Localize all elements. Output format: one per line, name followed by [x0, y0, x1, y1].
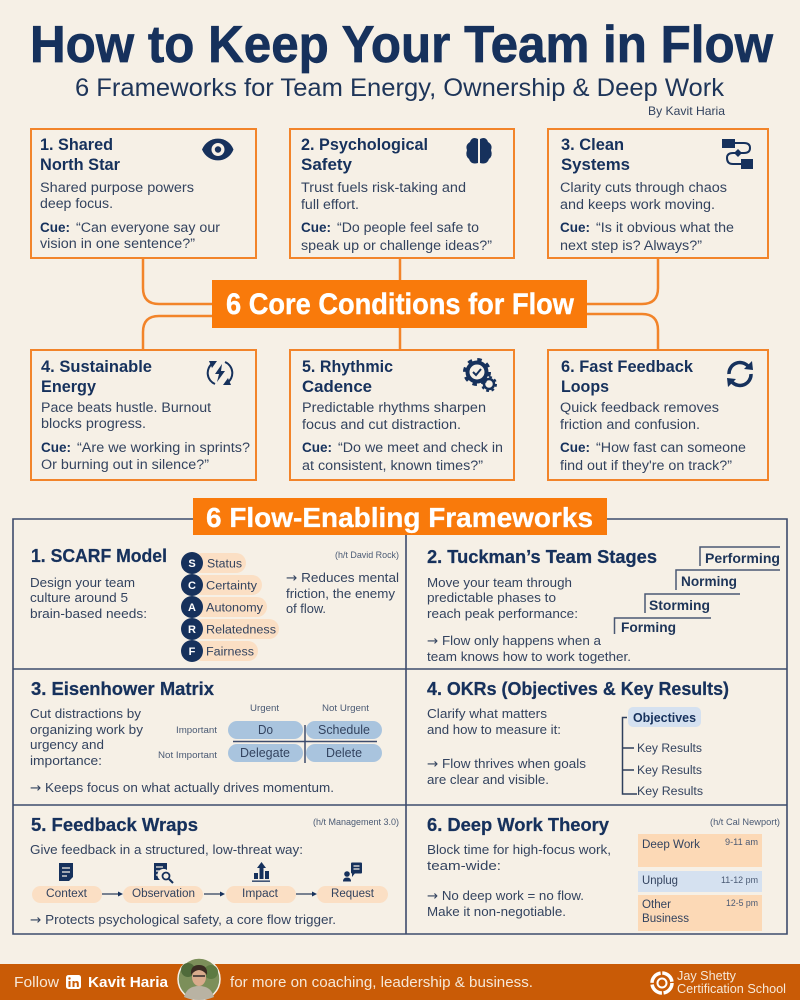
feedback process flow: Observation	[132, 888, 195, 900]
panel: deep work theory: 6. Deep Work Theory	[427, 815, 609, 835]
staircase diagram: Storming	[649, 597, 710, 613]
title: How to Keep Your Team in Flow	[30, 16, 774, 74]
priority matrix: Schedule	[318, 722, 370, 737]
panel: scarf model: → Reduces mental	[286, 570, 399, 586]
byline: By Kavit Haria	[648, 104, 725, 118]
schedule blocks: Unplug	[642, 875, 678, 887]
scarf list: Certainty	[206, 580, 257, 592]
panel: tuckman's team stages: 2. Tuckman’s Team Stages	[427, 547, 657, 567]
scarf list: Relatedness	[206, 624, 276, 636]
panel: rhythmic cadence	[290, 350, 514, 480]
panel: shared north star: Shared purpose powers	[40, 180, 194, 195]
panel: tuckman's team stages: team knows how to work together.	[427, 649, 631, 664]
panel: psychological safety: full effort.	[301, 197, 359, 212]
panel: sustainable energy: blocks progress.	[41, 416, 146, 431]
panel: shared north star: Cue:	[40, 220, 70, 235]
panel: scarf model: Design your team	[30, 575, 135, 590]
panel: feedback wraps	[30, 815, 399, 928]
priority matrix: Not Urgent	[322, 703, 370, 713]
panel: eisenhower matrix	[30, 679, 382, 796]
panel: fast feedback loops: 6. Fast Feedback	[561, 357, 694, 376]
panel: clean systems: Systems	[561, 155, 630, 174]
logo: certification school	[652, 968, 786, 996]
okr tree: Key Results	[637, 786, 703, 798]
panel: shared north star: North Star	[40, 155, 120, 174]
panel: tuckman's team stages: Move your team through	[427, 575, 572, 590]
feedback process flow: Request	[331, 888, 375, 900]
subtitle: 6 Frameworks for Team Energy, Ownership & Deep Work	[75, 74, 725, 102]
panel: eisenhower matrix: 3. Eisenhower Matrix	[31, 679, 214, 699]
schedule blocks: 11-12 pm	[721, 875, 758, 885]
footer band: for more on coaching, leadership & business.	[230, 974, 533, 991]
okr tree: Key Results	[637, 765, 702, 777]
staircase diagram	[614, 547, 780, 635]
scarf list: Fairness	[206, 646, 254, 658]
scarf list: Autonomy	[206, 602, 263, 614]
panel: fast feedback loops	[548, 350, 768, 480]
panel: clean systems: “Is it obvious what the	[596, 220, 734, 235]
panel: scarf model: brain-based needs:	[30, 606, 147, 621]
scarf list: A	[188, 602, 196, 614]
panel: okrs: → Flow thrives when goals	[427, 756, 587, 772]
scarf list: F	[189, 646, 196, 658]
panel: fast feedback loops: Quick feedback removes	[560, 400, 719, 415]
panel: eisenhower matrix: importance:	[30, 753, 102, 768]
panel: sustainable energy	[31, 350, 256, 480]
priority matrix: Urgent	[250, 703, 280, 713]
panel: feedback wraps: (h/t Management 3.0)	[313, 817, 399, 827]
footer band: Kavit Haria	[88, 974, 169, 991]
priority matrix: Not Important	[158, 750, 218, 760]
scarf list	[181, 552, 279, 662]
scarf list: R	[188, 624, 196, 636]
panel: sustainable energy: Energy	[41, 377, 97, 396]
panel: deep work theory: Block time for high-focus work,	[427, 842, 611, 857]
icon: linkedin	[66, 975, 81, 989]
staircase diagram: Performing	[705, 550, 780, 566]
panel: psychological safety: Trust fuels risk-taking and	[301, 180, 466, 195]
panel: tuckman's team stages: reach peak performance:	[427, 606, 578, 621]
panel: eisenhower matrix: Cut distractions by	[30, 706, 142, 721]
panel: clean systems: and keeps work moving.	[560, 197, 715, 212]
panel: feedback wraps: → Protects psychological safety, a core flow trigger.	[30, 912, 336, 928]
okr tree: Key Results	[637, 743, 702, 755]
icon: brain	[466, 138, 492, 164]
panel: shared north star: deep focus.	[40, 196, 113, 211]
panel: scarf model: of flow.	[286, 601, 326, 616]
panel: psychological safety	[290, 129, 514, 258]
panel: eisenhower matrix: → Keeps focus on what actually drives momentum.	[30, 780, 334, 796]
panel: tuckman's team stages: predictable phases to	[427, 590, 556, 605]
panel: sustainable energy: Pace beats hustle. Burnout	[41, 400, 211, 415]
panel: feedback wraps: 5. Feedback Wraps	[31, 815, 198, 835]
center banner: 6 core conditions: 6 Core Conditions for Flow	[226, 288, 575, 321]
panel: fast feedback loops: Cue:	[560, 440, 590, 455]
logo: certification school: Certification School	[677, 981, 786, 996]
panel: clean systems: 3. Clean	[561, 135, 624, 154]
priority matrix: Delete	[326, 745, 362, 760]
panel: shared north star	[31, 129, 256, 258]
panel: deep work theory: → No deep work = no flow.	[427, 888, 584, 904]
center banner: 6 core conditions	[212, 280, 587, 328]
panel: sustainable energy: Or burning out in silence?”	[41, 457, 209, 472]
panel: fast feedback loops: “How fast can someone	[596, 440, 746, 455]
panel: shared north star: vision in one sentence?”	[40, 236, 195, 251]
panel: psychological safety: 2. Psychological	[301, 135, 428, 154]
schedule blocks: Other	[642, 899, 671, 911]
staircase diagram: Norming	[681, 573, 737, 589]
panel: eisenhower matrix: organizing work by	[30, 722, 144, 737]
panel: scarf model: (h/t David Rock)	[335, 550, 399, 560]
panel: rhythmic cadence: “Do we meet and check in	[338, 440, 503, 455]
scarf list: Status	[207, 558, 242, 570]
okr tree: Objectives	[633, 711, 696, 725]
panel: okrs: Clarify what matters	[427, 706, 548, 721]
panel: clean systems	[548, 129, 768, 258]
panel: clean systems: next step is? Always?”	[560, 238, 702, 253]
icon: request speech	[343, 862, 362, 882]
panel: tuckman's team stages	[427, 547, 780, 664]
priority matrix: Do	[258, 722, 273, 737]
panel: okrs	[427, 679, 729, 798]
panel: tuckman's team stages: → Flow only happens when a	[427, 633, 602, 649]
panel: psychological safety: Safety	[301, 155, 353, 174]
panel: feedback wraps: Give feedback in a structured, low-threat way:	[30, 842, 303, 857]
staircase diagram: Forming	[621, 619, 676, 635]
panel: scarf model	[30, 546, 399, 662]
feedback process flow: Impact	[242, 888, 279, 900]
schedule blocks: 12-5 pm	[726, 898, 758, 908]
panel: deep work theory: (h/t Cal Newport)	[710, 817, 780, 827]
panel: rhythmic cadence: Predictable rhythms sharpen	[302, 400, 486, 415]
icon: impact chart	[252, 862, 270, 882]
panel: eisenhower matrix: urgency and	[30, 737, 104, 752]
panel: fast feedback loops: Loops	[561, 377, 609, 396]
icon: workflow	[722, 139, 753, 169]
connector lines	[143, 258, 658, 350]
panel: rhythmic cadence: focus and cut distraction.	[302, 417, 461, 432]
icon: energy cycle	[208, 361, 232, 385]
panel: deep work theory: Make it non-negotiable.	[427, 904, 566, 919]
panel: rhythmic cadence: at consistent, known times?”	[302, 458, 483, 473]
panel: scarf model: friction, the enemy	[286, 586, 396, 601]
icon: eye	[202, 139, 234, 160]
panel: okrs: and how to measure it:	[427, 722, 561, 737]
panel: deep work theory: team-wide:	[427, 858, 501, 873]
logo: certification school: Jay Shetty	[677, 968, 736, 983]
feedback process flow	[32, 886, 388, 903]
panel: okrs: 4. OKRs (Objectives & Key Results)	[427, 679, 729, 699]
feedback process flow: Context	[46, 888, 88, 900]
scarf list: S	[188, 558, 196, 570]
priority matrix	[158, 703, 382, 763]
schedule blocks: Deep Work	[642, 839, 700, 851]
frameworks grid frame	[13, 519, 787, 934]
icon: refresh	[727, 361, 753, 387]
panel: clean systems: Cue:	[560, 220, 590, 235]
panel: fast feedback loops: friction and confusion.	[560, 417, 700, 432]
schedule blocks: Business	[642, 913, 689, 925]
panel: rhythmic cadence: Cue:	[302, 440, 332, 455]
panel: psychological safety: Cue:	[301, 220, 331, 235]
panel: deep work theory	[427, 815, 780, 931]
panel: scarf model: culture around 5	[30, 590, 128, 605]
panel: fast feedback loops: find out if they're on track?”	[560, 458, 732, 473]
panel: psychological safety: “Do people feel safe to	[337, 220, 479, 235]
footer band	[0, 958, 800, 1000]
panel: sustainable energy: “Are we working in sprints?	[77, 440, 250, 455]
icon: observation document	[154, 863, 173, 883]
avatar photo	[178, 958, 220, 1000]
schedule blocks: 9-11 am	[725, 837, 758, 847]
panel: psychological safety: speak up or challenge ideas?”	[301, 238, 492, 253]
panel: scarf model: 1. SCARF Model	[31, 546, 167, 566]
panel: shared north star: “Can everyone say our	[76, 220, 221, 235]
panel: shared north star: 1. Shared	[40, 135, 113, 154]
okr tree	[622, 707, 703, 798]
icon: context document	[59, 863, 73, 881]
banner: flow-enabling frameworks: 6 Flow-Enabling Frameworks	[206, 502, 593, 533]
panel: sustainable energy: Cue:	[41, 440, 71, 455]
panel: sustainable energy: 4. Sustainable	[41, 357, 152, 376]
schedule blocks	[638, 834, 762, 931]
priority matrix: Important	[176, 725, 218, 735]
panel: rhythmic cadence: 5. Rhythmic	[302, 357, 393, 376]
icon: gears	[464, 360, 496, 391]
scarf list: C	[188, 580, 196, 592]
priority matrix: Delegate	[240, 745, 290, 760]
panel: rhythmic cadence: Cadence	[302, 377, 372, 396]
panel: okrs: are clear and visible.	[427, 772, 549, 787]
footer band: Follow	[14, 974, 59, 991]
panel: clean systems: Clarity cuts through chaos	[560, 180, 727, 195]
